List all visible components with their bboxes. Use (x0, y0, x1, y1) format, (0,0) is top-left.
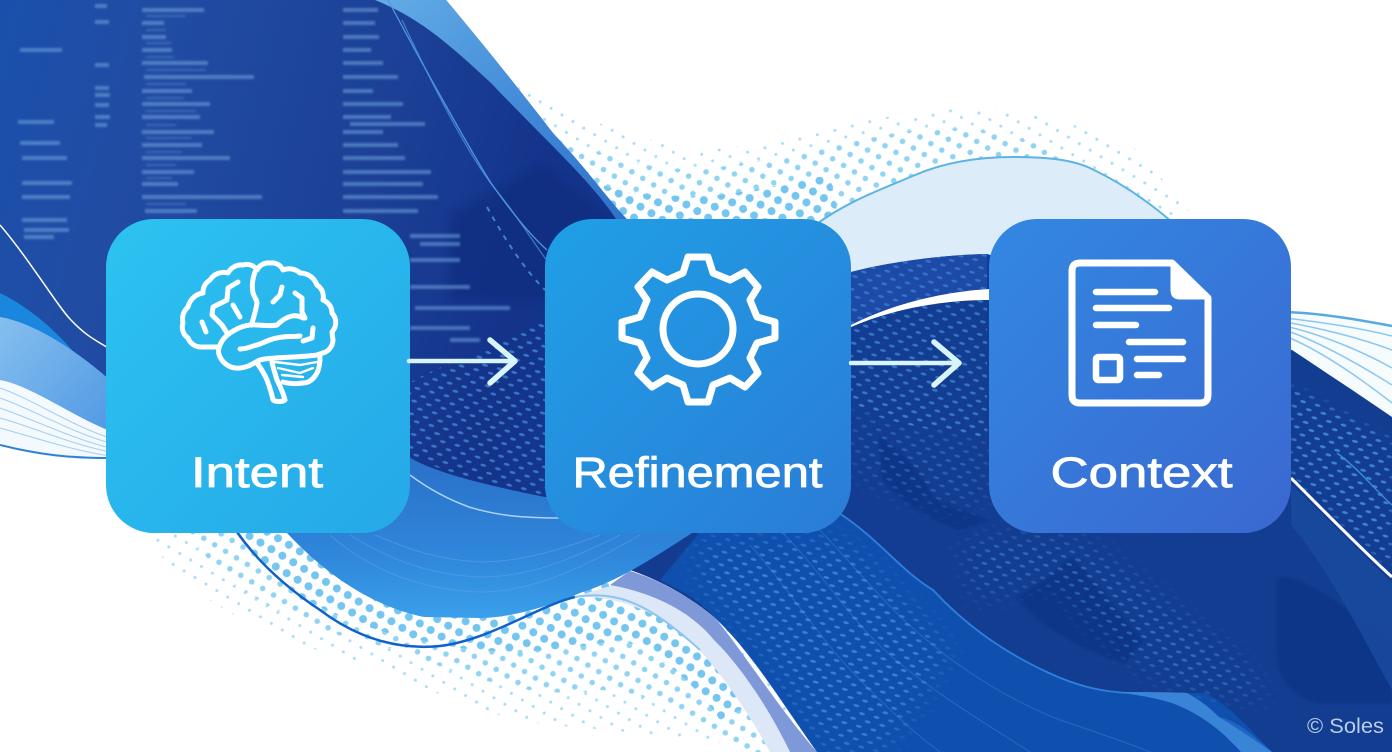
pale wave behind the Context card (815, 157, 1172, 300)
crest line and fine lines on lower right wave (750, 513, 1150, 752)
dotted fields lower right (660, 370, 1392, 752)
white slash between Refinement and Context (851, 289, 989, 327)
icon: document (1072, 263, 1208, 403)
card: Intent (106, 219, 410, 533)
left wave bands (0, 225, 110, 460)
label: Refinement: Refinement (572, 449, 823, 497)
lower right blue wave (660, 513, 1272, 752)
dotted band: between Refinement and Context (851, 254, 987, 440)
icon: brain (182, 263, 336, 402)
medium blue band along top edge (375, 0, 630, 222)
watermark: © Soles (1307, 715, 1384, 738)
light streak lower right (1116, 692, 1272, 752)
halftone dots: lower band (147, 530, 820, 752)
fine lines on medium wave (330, 475, 640, 592)
card: Context (989, 219, 1291, 533)
white line and blue band at right (1291, 453, 1392, 690)
lilac ribbon (576, 571, 817, 752)
arrow: Intent to Refinement (409, 340, 515, 383)
label: Context: Context (1050, 449, 1233, 497)
dotted wave: between Intent and Refinement (409, 320, 545, 497)
light curved line continuation (575, 595, 700, 650)
dark blobs lower right (879, 437, 1392, 703)
label: Intent: Intent (191, 449, 323, 497)
medium blue wave under the cards (286, 457, 700, 618)
fan of fine lines at right (1285, 312, 1392, 420)
dark curved line under wave (237, 532, 575, 647)
icon: gear (622, 257, 775, 402)
arrow: Refinement to Context (851, 342, 959, 385)
card: Refinement (545, 219, 851, 533)
dark wedge near gear card (450, 165, 625, 300)
blurred code columns (18, 6, 510, 340)
fine curved lines at top (388, 0, 548, 290)
halftone dots: upper band (504, 73, 1192, 230)
